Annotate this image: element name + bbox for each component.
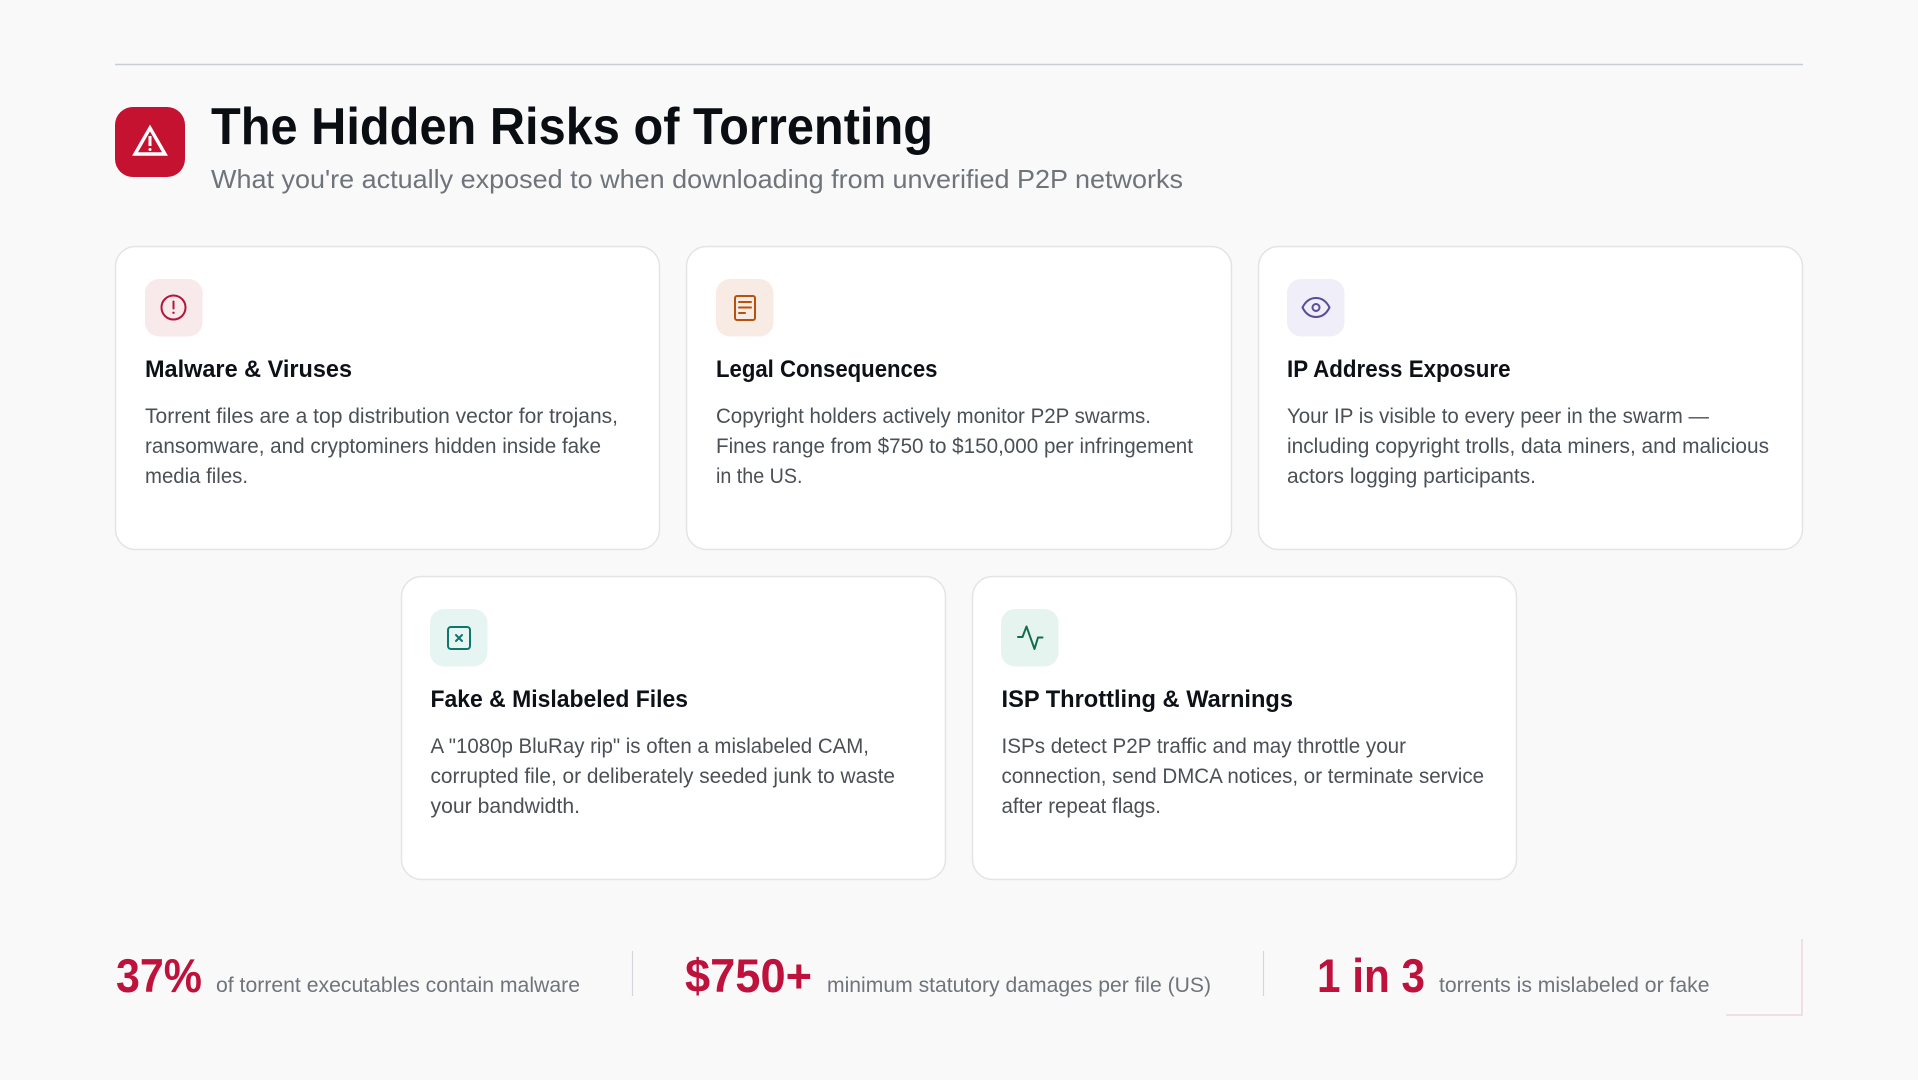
icon: warning triangle	[115, 107, 185, 177]
text block: Copyright holders actively monitor P2P swarms.	[716, 405, 1151, 428]
stat: mislabeled torrents: torrents is mislabeled or fake	[1439, 974, 1710, 997]
stat: malware share: of torrent executables contain malware	[216, 974, 580, 997]
panel: fake and mislabeled files	[402, 576, 946, 880]
stat: statutory damages: $750+	[685, 949, 812, 1002]
heading: Fake & Mislabeled Files	[430, 686, 688, 713]
icon: eye	[1287, 279, 1344, 336]
text block: Torrent files are a top distribution vector for trojans,	[145, 405, 618, 428]
title: The Hidden Risks of Torrenting	[211, 98, 933, 156]
stat: malware share: 37%	[116, 949, 202, 1002]
text block: after repeat flags.	[1002, 795, 1161, 818]
header	[115, 98, 1183, 194]
text block	[145, 405, 618, 488]
heading: IP Address Exposure	[1287, 356, 1510, 383]
heading: Legal Consequences	[716, 356, 938, 383]
text block: media files.	[145, 465, 248, 488]
text block	[1002, 735, 1484, 818]
text block: ISPs detect P2P traffic and may throttle your	[1002, 735, 1406, 758]
text block: actors logging participants.	[1287, 465, 1536, 488]
text block: in the US.	[716, 465, 802, 488]
text block: Fines range from $750 to $150,000 per infringement	[716, 435, 1193, 458]
text block	[430, 735, 895, 818]
text block: A "1080p BluRay rip" is often a mislabeled CAM,	[430, 735, 869, 758]
icon: x box	[430, 609, 488, 666]
text block: ransomware, and cryptominers hidden inside fake	[145, 435, 601, 458]
icon: pulse	[1001, 609, 1058, 666]
heading: Malware & Viruses	[145, 356, 352, 383]
stat: malware share	[116, 949, 580, 1002]
subtitle: What you're actually exposed to when downloading from unverified P2P networks	[211, 164, 1183, 194]
heading: ISP Throttling & Warnings	[1002, 686, 1293, 713]
text block: your bandwidth.	[430, 795, 580, 818]
panel: ISP throttling and warnings	[972, 576, 1516, 880]
panel: legal consequences	[686, 246, 1232, 550]
text block	[1287, 405, 1769, 488]
icon: alert circle	[145, 279, 202, 336]
panel: malware and viruses	[116, 246, 660, 550]
stat: statutory damages	[685, 949, 1211, 1002]
text block: corrupted file, or deliberately seeded junk to waste	[430, 765, 895, 788]
panel: IP address exposure	[1258, 246, 1802, 550]
icon: document	[716, 279, 774, 336]
stat: statutory damages: minimum statutory damages per file (US)	[827, 974, 1211, 997]
text block: connection, send DMCA notices, or terminate service	[1002, 765, 1484, 788]
stat: mislabeled torrents	[1317, 949, 1710, 1002]
text block: Your IP is visible to every peer in the swarm —	[1287, 405, 1709, 428]
text block: including copyright trolls, data miners, and malicious	[1287, 435, 1769, 458]
text block	[716, 405, 1193, 488]
stat: mislabeled torrents: 1 in 3	[1317, 949, 1425, 1002]
